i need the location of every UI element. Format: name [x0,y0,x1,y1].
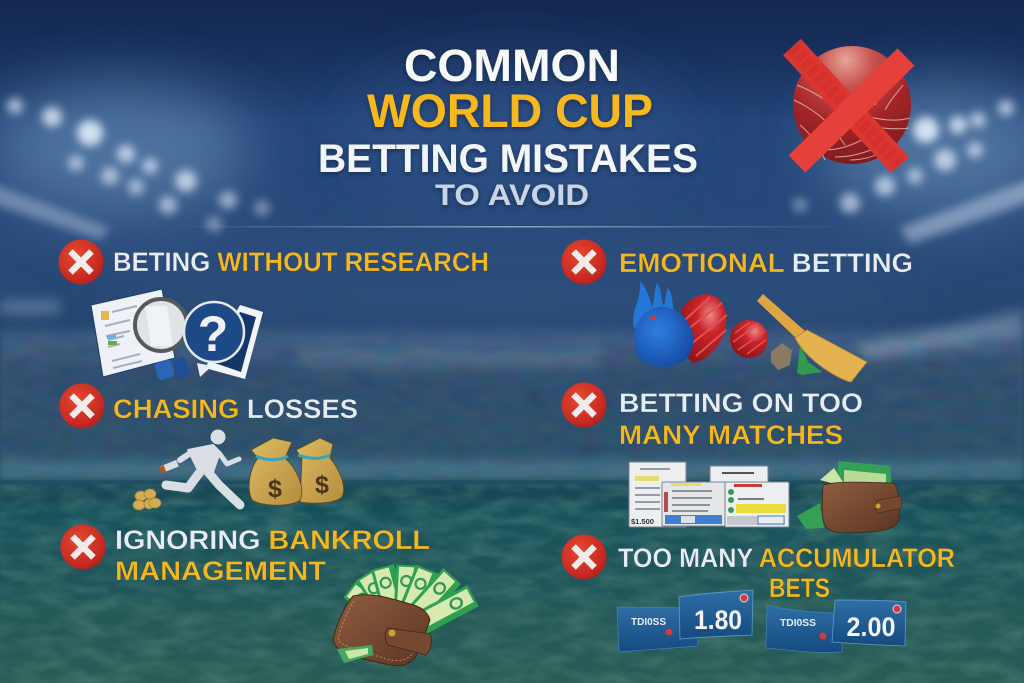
icon: red cross [60,524,106,570]
leaves [797,345,822,375]
icon: wallet with cash [797,461,902,532]
title: BETTING MISTAKES [318,137,698,181]
icon: betting slips [629,462,789,527]
heading: EMOTIONAL BETTING [619,248,913,278]
icon: red cross [562,240,606,284]
bag: $ [315,471,329,499]
icon: documents, magnifier and question: ? [198,306,228,362]
icon: odds ticket 2.00: TDI0SS [780,618,816,629]
icon: odds ticket 2.00 [766,600,906,653]
item: ignoring bankroll management [60,524,430,586]
blue blob [634,307,693,367]
icon: odds ticket 1.80: TDI0SS [631,617,666,628]
heading: CHASING LOSSES [113,394,358,424]
stadium lights left [0,98,270,240]
item: ignoring bankroll management: MANAGEMENT [115,556,327,586]
icon: red cross [562,534,606,580]
item: chasing losses [60,384,358,428]
bag: $ [268,475,282,503]
icon: red cross [58,240,104,284]
item: betting without research [58,240,489,284]
item: too many accumulator bets [562,534,955,603]
icon: odds ticket 1.80: 1.80 [694,605,742,635]
heading: TOO MANY ACCUMULATOR [618,543,955,573]
heading: BETING WITHOUT RESEARCH [113,247,489,277]
red heart ball [680,294,726,363]
heading: BETTING ON TOO [619,388,863,418]
bag [296,438,344,503]
bag [249,438,302,505]
icon: red cross [562,382,606,428]
rock [771,343,792,370]
bat [757,294,805,339]
coins [133,489,161,510]
icon: red cross [60,384,104,428]
stands [0,300,1024,370]
runner [166,430,240,505]
title [318,40,698,212]
icon: documents, magnifier and question [91,289,263,381]
icon: odds ticket 1.80 [617,590,753,652]
title: COMMON [404,40,620,91]
icon: running man chasing money bags [133,430,344,510]
item: emotional betting [562,240,913,284]
icon: crossed out cricket ball [792,46,911,165]
icon: emotional cricket imagery [633,281,867,382]
heading: IGNORING BANKROLL [115,525,430,555]
title: TO AVOID [435,179,589,212]
item: betting on too many matches: MANY MATCHES [619,420,843,450]
flames [633,281,674,328]
title: WORLD CUP [367,84,653,137]
icon: odds ticket 2.00: 2.00 [846,612,896,642]
small ball [730,320,768,358]
icon: wallet with cash fan [333,564,479,666]
stadium lights right [793,100,1024,244]
item: betting on too many matches [562,382,863,450]
item: too many accumulator bets: BETS [769,573,830,603]
icon: betting slips: $1.500 [631,517,654,526]
